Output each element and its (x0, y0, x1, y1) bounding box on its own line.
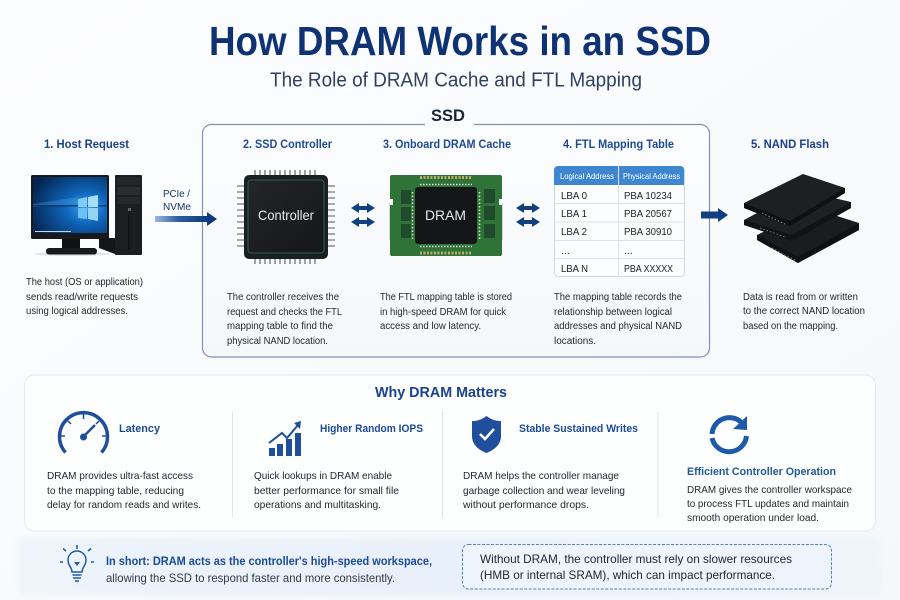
step 3: onboard DRAM cache (380, 137, 512, 332)
text: stable writes: without performance drops. (462, 499, 589, 511)
subtitle: The Role of DRAM Cache and FTL Mapping (270, 68, 642, 92)
icon: DRAM module: DRAM (425, 207, 466, 223)
description: NAND: to the correct NAND location (743, 306, 865, 317)
table: LBA to PBA mapping: LBA N (561, 263, 588, 275)
description: FTL table: relationship between logical (554, 307, 672, 318)
heading: FTL table: 4. FTL Mapping Table (563, 137, 674, 151)
arrow: DRAM to FTL table, two-way (516, 203, 540, 227)
icon: refresh arrows (712, 416, 747, 452)
callout: without DRAM: (HMB or internal SRAM), which can impact performance. (480, 568, 775, 582)
step 5: NAND flash (743, 137, 865, 332)
text: latency: to the mapping table, reducing (47, 485, 184, 497)
text: IOPS (254, 470, 399, 511)
text: stable writes (462, 470, 625, 511)
description: controller: The controller receives the (227, 292, 339, 303)
heading: latency: Latency (119, 423, 161, 435)
title: How DRAM Works in an SSD (209, 18, 711, 64)
step 4: FTL mapping table (554, 137, 684, 347)
table: LBA to PBA mapping (554, 166, 684, 277)
heading: efficient operation: Efficient Controller Operation (687, 466, 836, 478)
description: NAND: Data is read from or written (743, 292, 858, 303)
icon: DRAM module (389, 175, 503, 256)
step 2: SSD controller (227, 137, 342, 347)
icon: rising bar chart (269, 421, 301, 456)
table: LBA to PBA mapping: ... (561, 245, 570, 257)
text: IOPS: operations and multitasking. (254, 499, 381, 511)
heading: host request: 1. Host Request (44, 137, 129, 151)
description: DRAM: access and low latency. (380, 321, 481, 332)
card: latency (47, 413, 201, 511)
SSD label: SSD (431, 106, 465, 125)
panel: why DRAM matters (24, 375, 876, 531)
description: FTL table: locations. (554, 336, 596, 347)
text: latency: delay for random reads and writes. (47, 499, 201, 511)
card: higher random IOPS (254, 421, 423, 511)
description: controller: mapping table to find the (227, 321, 333, 332)
text: efficient operation (687, 484, 852, 524)
table: LBA to PBA mapping: LBA 0 (561, 190, 587, 202)
table: LBA to PBA mapping: PBA 10234 (624, 190, 672, 202)
icon: controller chip (241, 172, 331, 262)
description: DRAM: in high-speed DRAM for quick (380, 307, 507, 318)
text: latency: DRAM provides ultra-fast access (47, 470, 193, 482)
description: FTL table (554, 292, 682, 347)
icon: light bulb (60, 545, 94, 581)
heading: DRAM cache: 3. Onboard DRAM Cache (383, 137, 511, 151)
description: FTL table: addresses and physical NAND (554, 321, 682, 332)
heading: IOPS: Higher Random IOPS (320, 423, 423, 435)
text: in short (106, 554, 432, 585)
table: LBA to PBA mapping: Logical Address (560, 171, 614, 181)
table: LBA to PBA mapping: PBA 20567 (624, 208, 672, 220)
description: host: The host (OS or application) (26, 277, 143, 288)
icon: NAND stack (744, 174, 859, 263)
heading: stable writes: Stable Sustained Writes (519, 423, 638, 435)
text: stable writes: garbage collection and wear leveling (463, 485, 625, 497)
icon: controller chip: Controller (258, 207, 314, 223)
description: NAND: based on the mapping. (743, 321, 838, 332)
description: controller: physical NAND location. (227, 336, 328, 347)
arrow: PCIe / NVMe link: NVMe (163, 201, 191, 213)
card: efficient controller operation (687, 416, 852, 524)
table: LBA to PBA mapping: ... (624, 245, 633, 257)
arrow: table to NAND (701, 208, 728, 222)
text: in short: allowing the SSD to respond faster and more consistently. (106, 571, 395, 585)
panel: summary band (18, 538, 882, 596)
icon: shield with check (472, 416, 501, 453)
text: IOPS: Quick lookups in DRAM enable (254, 470, 392, 482)
table: LBA to PBA mapping: PBA 30910 (624, 226, 672, 238)
heading: SSD controller: 2. SSD Controller (243, 137, 332, 151)
text: efficient operation: smooth operation under load. (687, 512, 819, 524)
text: efficient operation: DRAM gives the controller workspace (687, 484, 852, 496)
card: stable sustained writes (462, 416, 638, 511)
description: host: using logical addresses. (26, 306, 128, 317)
icon: speedometer (60, 413, 108, 452)
description: host: sends read/write requests (26, 292, 138, 303)
heading: why DRAM matters: Why DRAM Matters (375, 385, 507, 401)
text: stable writes: DRAM helps the controller manage (463, 470, 619, 482)
arrow: PCIe / NVMe link: PCIe / (163, 188, 190, 200)
step 1: host request (26, 137, 143, 317)
arrow: PCIe / NVMe link (155, 188, 217, 226)
description: DRAM (380, 292, 512, 332)
description: controller: request and checks the FTL (227, 307, 342, 318)
text: in short: In short: DRAM acts as the controller's high-speed workspace, (106, 554, 432, 568)
description: FTL table: The mapping table records the (554, 292, 682, 303)
callout: without DRAM: Without DRAM, the controller must rely on slower resources (480, 552, 792, 566)
table: LBA to PBA mapping: LBA 2 (561, 226, 587, 238)
panel: SSD enclosure (202, 106, 710, 357)
description: host (26, 277, 143, 317)
arrow: controller to DRAM, two-way (351, 203, 375, 227)
description: controller (227, 292, 342, 347)
table: LBA to PBA mapping: LBA 1 (561, 208, 587, 220)
table: LBA to PBA mapping: PBA XXXXX (624, 263, 673, 275)
text: efficient operation: to process FTL updates and maintain (687, 498, 849, 510)
description: DRAM: The FTL mapping table is stored (380, 292, 512, 303)
text: IOPS: better performance for small file (254, 485, 399, 497)
icon: desktop computer (31, 175, 142, 256)
table: LBA to PBA mapping: Physical Address (623, 171, 680, 181)
description: NAND (743, 292, 865, 332)
heading: NAND flash: 5. NAND Flash (751, 137, 829, 151)
text: latency (47, 470, 201, 511)
callout: without DRAM (462, 544, 832, 589)
